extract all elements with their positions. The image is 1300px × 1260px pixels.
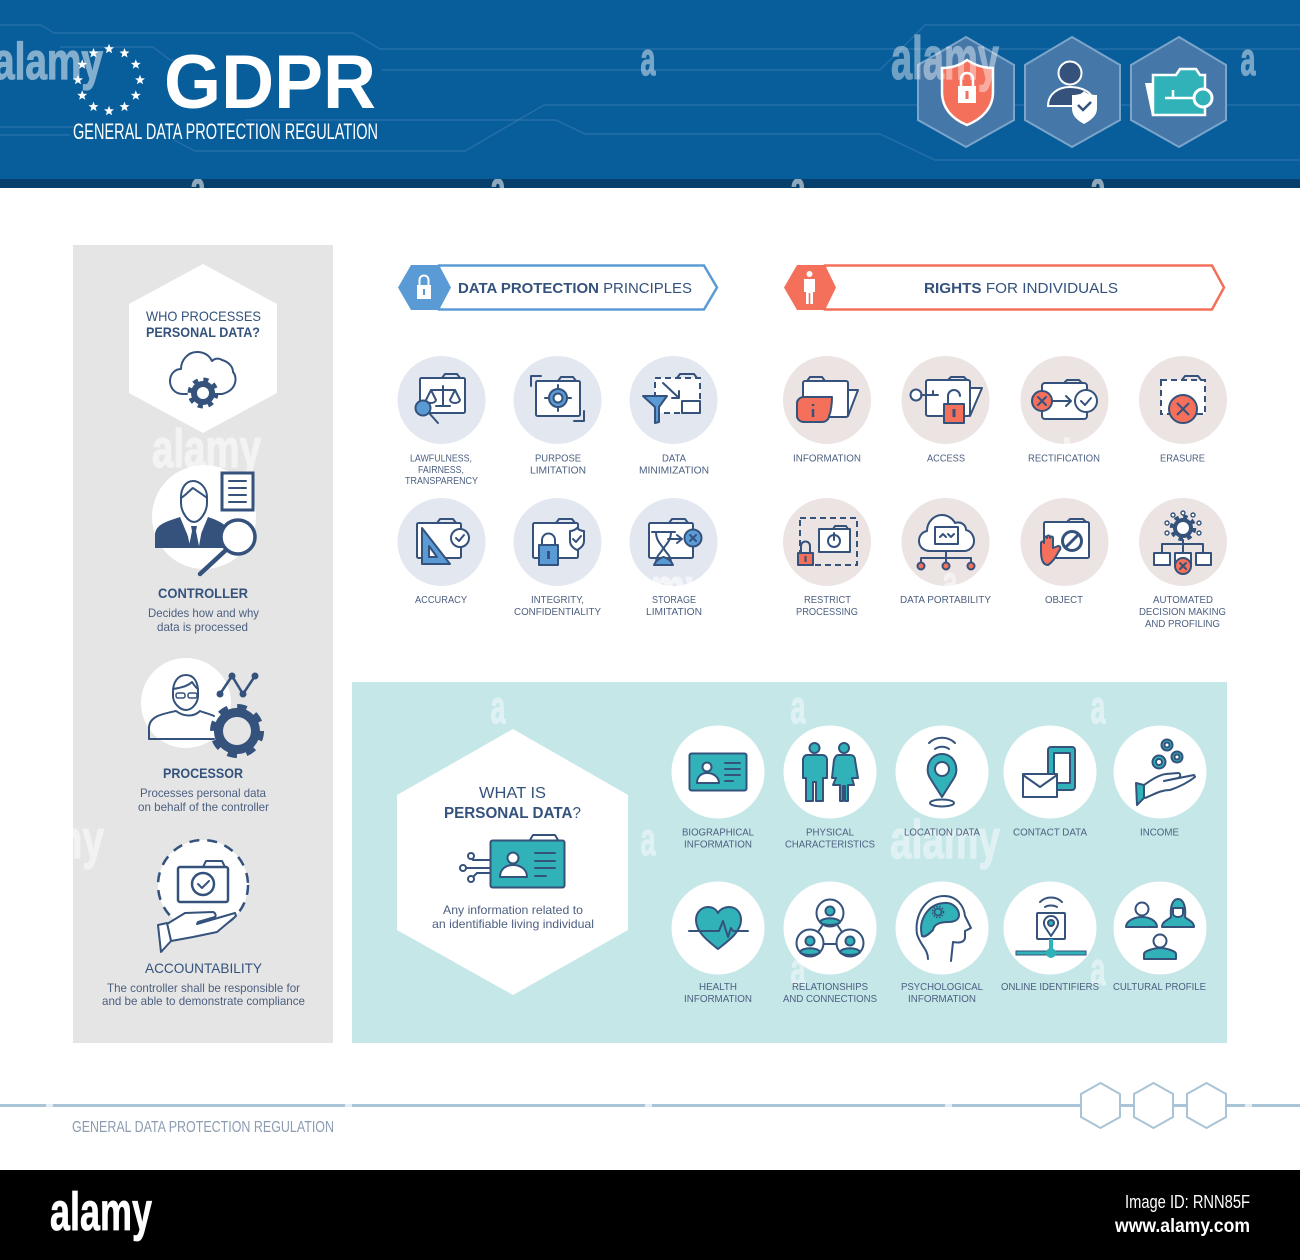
block: controller: [148, 465, 259, 634]
data type: psychological information: PSYCHOLOGICAL: [901, 982, 983, 993]
watermark: header right: alamy: [891, 25, 999, 92]
data type: health information: INFORMATION: [684, 994, 752, 1005]
header banner: a: [190, 162, 206, 214]
data type: online identifiers: ONLINE IDENTIFIERS: [1001, 982, 1099, 993]
heading: data protection principles: DATA PROTECTION PRINCIPLES: [458, 280, 692, 297]
principle: purpose limitation: LIMITATION: [530, 466, 586, 476]
header banner: a: [640, 33, 656, 85]
data type: biographical information: [672, 726, 764, 850]
principle: lawfulness: FAIRNESS,: [418, 465, 464, 476]
data type: biographical information: INFORMATION: [684, 840, 752, 850]
watermarks: teal panel: [490, 681, 1106, 995]
data type: income: INCOME: [1140, 828, 1179, 838]
block: processor: Processes personal data: [140, 786, 266, 800]
hexagon: what is personal data: Any information related to: [443, 903, 583, 917]
watermarks: teal panel: a: [1090, 943, 1106, 995]
heading: data protection principles: [398, 265, 717, 310]
icon: user shield hexagon: [1025, 37, 1120, 147]
panel: what is personal data: [352, 681, 1227, 1043]
principle: data minimization: DATA: [662, 454, 686, 464]
right: automated decision making: AUTOMATED: [1153, 595, 1213, 606]
block: processor: [138, 658, 269, 814]
data type: relationships and connections: RELATIONSHIPS: [792, 982, 868, 993]
right: data portability: a: [942, 556, 958, 608]
data type: physical characteristics: CHARACTERISTICS: [785, 840, 875, 850]
header banner: [0, 0, 1300, 188]
block: accountability: and be able to demonstrate compliance: [102, 994, 305, 1008]
block: processor: PROCESSOR: [163, 765, 243, 781]
data type: income: [1114, 726, 1206, 838]
block: controller: data is processed: [157, 620, 248, 634]
right: information: [783, 356, 871, 464]
header banner: a: [1090, 162, 1106, 214]
principle: storage limitation: STORAGE: [652, 595, 696, 606]
watermarks: teal panel: a: [490, 681, 506, 733]
hexagon: who processes: PERSONAL DATA?: [146, 324, 260, 340]
data type: cultural profile: [1113, 882, 1206, 993]
header banner: a: [1240, 33, 1256, 85]
right: object: [1020, 498, 1108, 606]
right: information: INFORMATION: [793, 454, 861, 464]
data type: biographical information: BIOGRAPHICAL: [682, 828, 754, 838]
stock image strip: [0, 1170, 1300, 1260]
header banner: a: [490, 162, 506, 214]
right: erasure: ERASURE: [1160, 454, 1205, 464]
hexagon: what is personal data: PERSONAL DATA?: [444, 805, 581, 822]
data type: physical characteristics: PHYSICAL: [806, 828, 854, 838]
principle: lawfulness: [398, 356, 486, 487]
data type: physical characteristics: [784, 726, 876, 850]
right: object: OBJECT: [1045, 595, 1083, 606]
subtitle: GENERAL DATA PROTECTION REGULATION: [73, 119, 378, 144]
principle: data minimization: MINIMIZATION: [639, 466, 709, 476]
principle: lawfulness: LAWFULNESS,: [410, 454, 472, 464]
watermarks: teal panel: a: [790, 681, 806, 733]
right: data portability: DATA PORTABILITY: [900, 595, 991, 606]
data type: contact data: CONTACT DATA: [1013, 828, 1087, 838]
principle: lawfulness: TRANSPARENCY: [405, 476, 478, 487]
data type: health information: [672, 882, 764, 1005]
data type: cultural profile: CULTURAL PROFILE: [1113, 982, 1206, 993]
principle: storage limitation: LIMITATION: [646, 607, 702, 618]
principle: data minimization: [630, 356, 718, 476]
icon: EU stars circle: [73, 44, 145, 115]
data type: health information: HEALTH: [699, 982, 737, 993]
principle: storage limitation: [597, 498, 718, 618]
hexagon: what is personal data: an identifiable living individual: [432, 917, 594, 931]
principle: integrity, confidentiality: INTEGRITY,: [531, 595, 584, 606]
principle: purpose limitation: PURPOSE: [535, 454, 581, 464]
principle: storage limitation: alamy: [597, 558, 707, 618]
data type: online identifiers: [1001, 882, 1099, 993]
data type: location data: LOCATION DATA: [904, 828, 980, 838]
block: accountability: ACCOUNTABILITY: [145, 960, 263, 976]
right: rectification: RECTIFICATION: [1028, 454, 1100, 464]
right: rectification: alamy: [1040, 429, 1150, 489]
hexagon: who processes: [129, 264, 277, 433]
title: GDPR: [164, 40, 376, 125]
watermarks: teal panel: alamy: [890, 810, 1000, 870]
strip url: www.alamy.com: [1114, 1216, 1250, 1237]
right: automated decision making: DECISION MAKING: [1139, 607, 1226, 618]
panel: who processes personal data: [0, 245, 333, 1043]
hexagon: what is personal data: WHAT IS: [479, 785, 546, 802]
right: restrict processing: RESTRICT: [804, 595, 851, 606]
right: erasure: [1139, 356, 1227, 464]
right: automated decision making: AND PROFILING: [1145, 619, 1220, 630]
principle: purpose limitation: [514, 356, 602, 476]
heading: rights for individuals: RIGHTS FOR INDIVIDUALS: [924, 280, 1118, 297]
strip image id: Image ID: RNN85F: [1125, 1192, 1250, 1212]
right: data portability: [900, 498, 991, 608]
data type: psychological information: INFORMATION: [908, 994, 976, 1005]
panel: data protection principles: [398, 265, 718, 618]
right: automated decision making: [1139, 498, 1227, 630]
hexagon: what is personal data: [397, 729, 628, 995]
right: restrict processing: PROCESSING: [796, 607, 858, 618]
header banner: a: [790, 162, 806, 214]
data type: relationships and connections: AND CONNECTIONS: [783, 994, 877, 1005]
block: accountability: The controller shall be responsible for: [107, 981, 300, 995]
data type: location data: [896, 726, 988, 838]
right: access: ACCESS: [927, 454, 965, 464]
footer text: GENERAL DATA PROTECTION REGULATION: [72, 1119, 334, 1136]
strip logo: alamy: [50, 1182, 152, 1242]
right: restrict processing: [783, 498, 871, 618]
principle: integrity, confidentiality: CONFIDENTIALITY: [514, 607, 601, 618]
right: rectification: [1020, 356, 1150, 489]
block: controller: CONTROLLER: [158, 585, 248, 601]
footer hexagons: [1081, 1083, 1226, 1128]
watermarks: teal panel: a: [790, 943, 806, 995]
data type: psychological information: [896, 882, 988, 1005]
hexagon: who processes: WHO PROCESSES: [146, 308, 261, 324]
principle: accuracy: [398, 498, 486, 606]
icon: folder key hexagon: [1131, 37, 1226, 147]
right: access: [902, 356, 990, 464]
panel: rights for individuals: [783, 265, 1227, 630]
footer: [0, 1083, 1300, 1136]
watermark: panel: alamy: [152, 419, 261, 479]
block: processor: on behalf of the controller: [138, 800, 269, 814]
principle: accuracy: ACCURACY: [415, 595, 467, 606]
icon: shield hexagon: [918, 37, 1014, 147]
block: controller: Decides how and why: [148, 606, 259, 620]
heading: rights for individuals: [784, 265, 1224, 310]
principle: integrity, confidentiality: [514, 498, 602, 618]
data type: relationships and connections: [783, 882, 877, 1005]
block: accountability: [102, 840, 305, 1008]
data type: contact data: [1004, 726, 1096, 838]
watermarks: teal panel: a: [1090, 681, 1106, 733]
watermarks: teal panel: a: [640, 813, 656, 865]
